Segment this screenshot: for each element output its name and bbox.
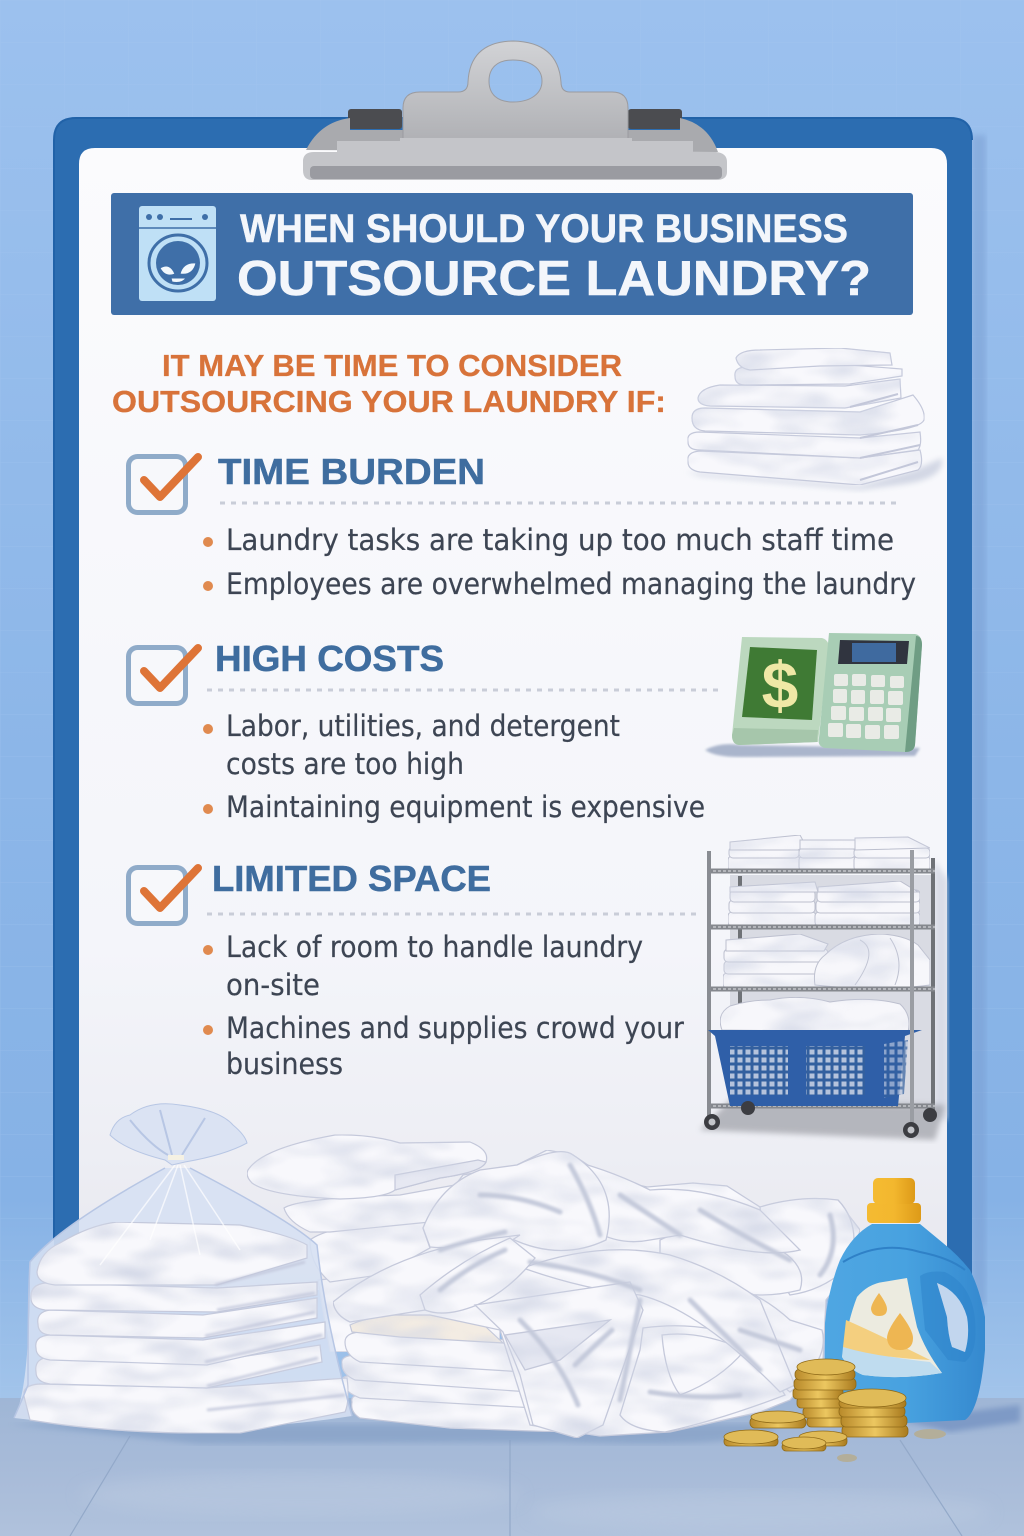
illustration: cash and calculator: $ bbox=[762, 648, 798, 722]
subheading bbox=[112, 348, 666, 419]
bottom shelf towels bbox=[720, 997, 909, 1032]
wheels bbox=[704, 1101, 937, 1138]
bullets: Lack of room to handle laundry bbox=[226, 930, 643, 964]
illustration: back towel stack bbox=[247, 1135, 500, 1352]
bag film bbox=[14, 1165, 352, 1418]
floor bbox=[0, 1398, 1024, 1536]
section: high costs bbox=[128, 638, 718, 824]
bagged towels bbox=[24, 1222, 348, 1433]
illustration: gold coins bbox=[724, 1359, 946, 1462]
clip bbox=[303, 41, 727, 184]
short stack bbox=[838, 1389, 908, 1437]
checkbox bbox=[128, 456, 198, 512]
heading: LIMITED SPACE bbox=[212, 858, 491, 899]
bullets bbox=[203, 709, 705, 824]
bullets: Laundry tasks are taking up too much staff time bbox=[226, 523, 894, 557]
label bbox=[842, 1278, 942, 1377]
clipboard board bbox=[54, 118, 986, 1305]
title banner bbox=[111, 193, 913, 315]
title text bbox=[237, 207, 871, 306]
top shelf towels bbox=[728, 835, 930, 871]
illustration: cash and calculator bbox=[705, 633, 922, 757]
checkbox bbox=[128, 868, 198, 924]
icon: washing machine bbox=[139, 206, 216, 301]
bullets: Labor, utilities, and detergent bbox=[226, 709, 620, 743]
fabric creases bbox=[440, 1165, 833, 1405]
title text: WHEN SHOULD YOUR BUSINESS bbox=[240, 207, 848, 251]
title text: OUTSOURCE LAUNDRY? bbox=[237, 252, 871, 306]
checkbox bbox=[128, 648, 198, 704]
bullets: Machines and supplies crowd your bbox=[226, 1011, 684, 1045]
illustration: detergent bottle bbox=[825, 1178, 1020, 1432]
subheading: OUTSOURCING YOUR LAUNDRY IF: bbox=[112, 384, 666, 419]
tall stack bbox=[793, 1359, 856, 1427]
folded stack bbox=[342, 1312, 560, 1432]
paper sheet bbox=[79, 148, 947, 1290]
illustration: folded and crumpled laundry pile bbox=[333, 1150, 860, 1438]
heading: TIME BURDEN bbox=[218, 451, 485, 492]
basket bbox=[708, 1030, 922, 1106]
bullets: costs are too high bbox=[226, 747, 464, 781]
bullets: Employees are overwhelmed managing the laundry bbox=[226, 567, 916, 601]
bullets: Maintaining equipment is expensive bbox=[226, 790, 705, 824]
second shelf towels bbox=[728, 881, 920, 926]
section: time burden bbox=[128, 451, 916, 601]
loose coins bbox=[724, 1411, 847, 1451]
section: limited space bbox=[128, 858, 700, 1081]
bullets bbox=[203, 930, 684, 1081]
subheading: IT MAY BE TIME TO CONSIDER bbox=[162, 348, 622, 383]
heading: HIGH COSTS bbox=[215, 638, 444, 679]
illustration: wire shelf with towels and basket bbox=[700, 835, 948, 1140]
crumpled mound bbox=[333, 1150, 860, 1438]
illustration: transparent bag of towels bbox=[14, 1104, 352, 1433]
bullets: business bbox=[226, 1047, 343, 1081]
shelves and posts bbox=[708, 850, 935, 1126]
bullets bbox=[203, 523, 916, 601]
bullets: on-site bbox=[226, 968, 320, 1002]
third shelf towels bbox=[723, 934, 930, 988]
illustration: folded towels bbox=[686, 348, 942, 490]
